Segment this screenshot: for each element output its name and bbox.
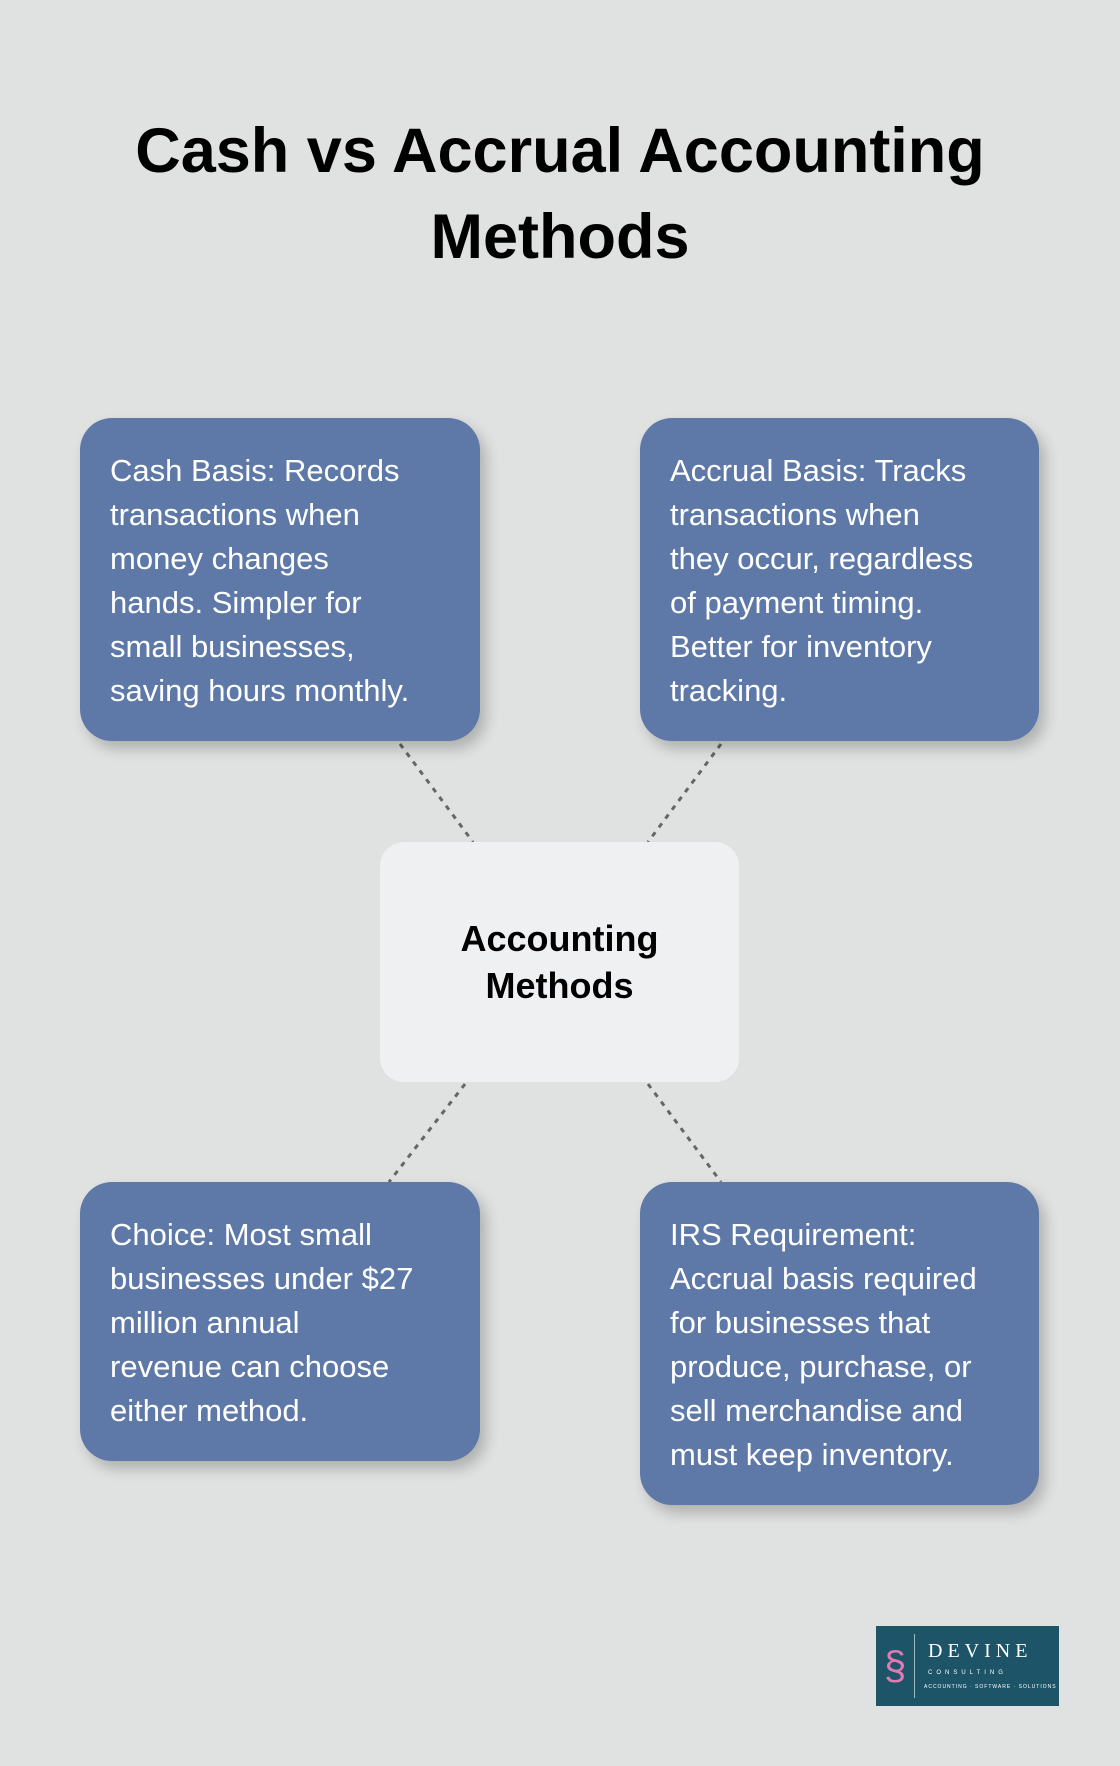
panel: choice: revenue can choose [110,1349,389,1384]
title: Cash vs Accrual Accounting [135,116,985,186]
panel: cash basis: money changes [110,541,329,576]
panel: cash basis: small businesses, [110,629,355,664]
panel: choice: either method. [110,1393,308,1428]
panel: choice: Choice: Most small [110,1217,372,1252]
panel: cash basis: Cash Basis: Records [110,453,399,488]
panel: accrual basis [640,418,1039,741]
panel: IRS requirement: produce, purchase, or [670,1349,972,1384]
logo [876,1626,1059,1706]
panel: choice: million annual [110,1305,300,1340]
panel: cash basis [80,418,480,741]
panel: IRS requirement: for businesses that [670,1305,930,1340]
title [135,116,985,272]
panel: IRS requirement: sell merchandise and [670,1393,963,1428]
center node: Accounting [460,918,658,959]
logo: DEVINE [928,1640,1032,1662]
panel: accrual basis: Better for inventory [670,629,932,664]
center node: Methods [485,965,633,1006]
title: Methods [430,202,689,272]
logo: § [884,1644,906,1688]
panel: IRS requirement: IRS Requirement: [670,1217,916,1252]
panel: choice [80,1182,480,1461]
center node [380,842,739,1082]
panel: accrual basis: of payment timing. [670,585,923,620]
logo: ACCOUNTING · SOFTWARE · SOLUTIONS [924,1684,1057,1690]
panel: cash basis: transactions when [110,497,360,532]
panel: IRS requirement: Accrual basis required [670,1261,977,1296]
panel: accrual basis: tracking. [670,673,787,708]
panel: accrual basis: they occur, regardless [670,541,973,576]
panel: cash basis: hands. Simpler for [110,585,362,620]
panel: accrual basis: Accrual Basis: Tracks [670,453,966,488]
panel: IRS requirement: must keep inventory. [670,1437,954,1472]
logo: CONSULTING [928,1670,1007,1676]
panel: choice: businesses under $27 [110,1261,413,1296]
panel: accrual basis: transactions when [670,497,920,532]
panel: IRS requirement [640,1182,1039,1505]
panel: cash basis: saving hours monthly. [110,673,409,708]
